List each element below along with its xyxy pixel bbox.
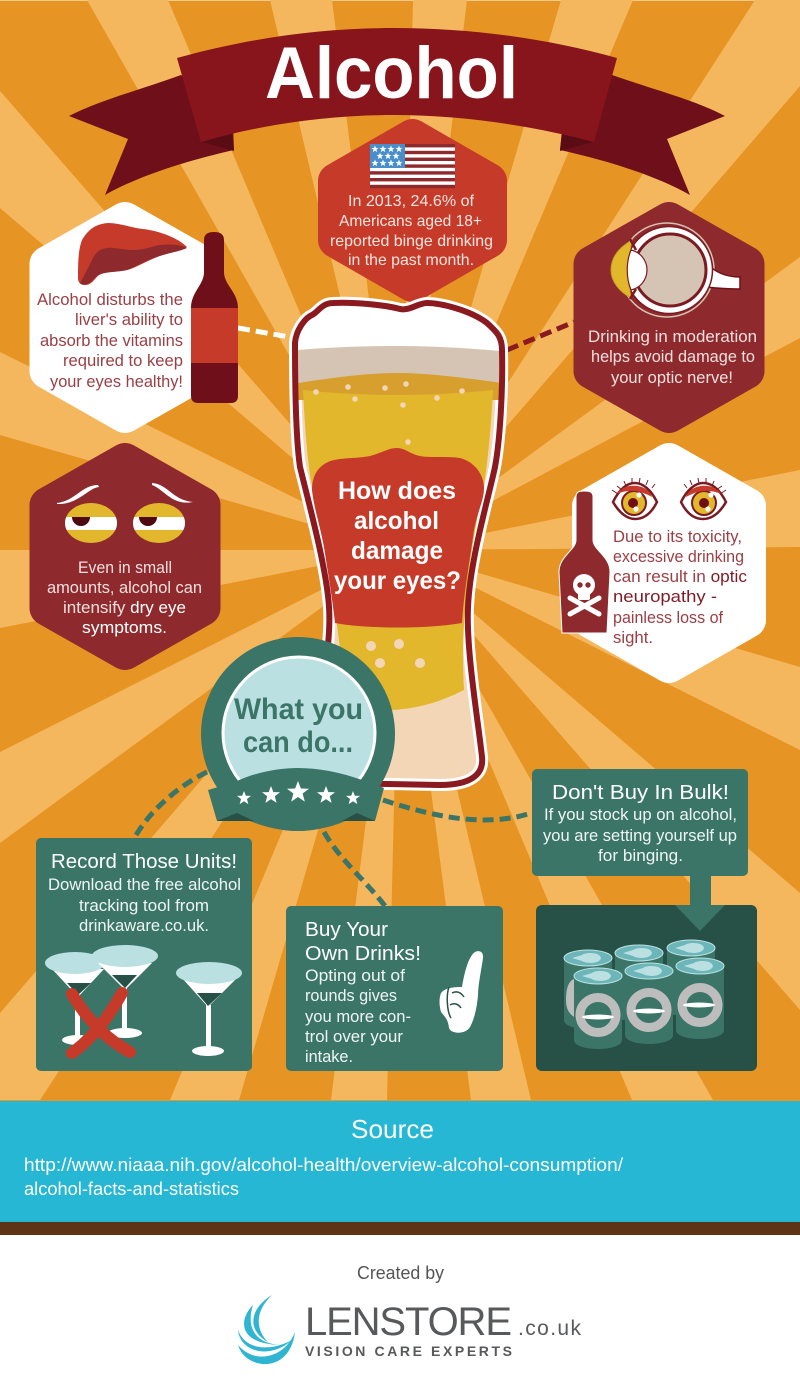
statistic text: In 2013, 24.6% of	[348, 193, 475, 210]
beer glass	[285, 295, 515, 785]
question text	[334, 477, 461, 595]
hexagon background	[592, 220, 746, 415]
box text: intake.	[305, 1048, 353, 1066]
ribbon folds	[217, 813, 375, 821]
box	[286, 906, 503, 1071]
optic nerve text	[588, 328, 757, 387]
dry eye text: Even in small	[78, 559, 172, 577]
statistic text: reported binge drinking	[330, 233, 493, 250]
box text: Opting out of	[305, 967, 405, 985]
source background	[0, 1101, 800, 1222]
neuropathy text: painless loss of	[613, 609, 723, 627]
banner main ribbon	[177, 28, 617, 142]
beer layers	[298, 308, 500, 710]
hexagon background	[336, 137, 489, 284]
neuropathy text	[613, 528, 747, 647]
brown strip	[0, 1222, 800, 1235]
box text: rounds gives	[305, 987, 397, 1005]
banner left fold	[202, 133, 234, 151]
badge: what you can do	[201, 637, 395, 831]
icon: wine bottle	[191, 232, 238, 403]
title banner	[69, 28, 725, 195]
badge text	[234, 693, 363, 759]
icon: sleepy eyes	[57, 483, 193, 543]
source heading: Source	[351, 1114, 434, 1144]
statistic text	[330, 193, 493, 269]
source band	[0, 1101, 800, 1235]
statistic text: in the past month.	[348, 252, 474, 269]
box heading: Own Drinks!	[305, 942, 421, 965]
box	[36, 838, 252, 1071]
optic nerve text: helps avoid damage to	[591, 348, 755, 366]
question label	[312, 448, 484, 628]
hexagon background	[48, 220, 202, 415]
box heading: Buy Your	[305, 918, 388, 941]
banner right fold	[560, 133, 593, 151]
badge inner	[223, 657, 375, 809]
question text: damage	[351, 537, 443, 565]
liver text: liver's ability to	[75, 311, 183, 329]
box heading: Don't Buy In Bulk!	[552, 781, 729, 804]
created by: Created by	[357, 1263, 444, 1283]
panel: optic neuropathy	[559, 461, 748, 665]
box text: tracking tool from	[79, 897, 209, 915]
hexagon background	[48, 461, 202, 652]
label blob	[312, 448, 484, 628]
logo mark	[238, 1295, 295, 1364]
arrow to cans	[675, 870, 725, 931]
panel: record those units	[36, 838, 252, 1071]
connector: badge to record units	[135, 772, 207, 837]
icon: thumb up	[440, 951, 483, 1033]
neuropathy text: can result in optic	[613, 568, 747, 586]
box text: trol over your	[305, 1028, 404, 1046]
logo domain: .co.uk	[518, 1317, 582, 1340]
box text: Download the free alcohol	[48, 876, 241, 894]
dry eye text: amounts, alcohol can	[47, 579, 202, 597]
icon: cans	[564, 940, 724, 1049]
box text: you more con-	[305, 1008, 411, 1026]
box	[532, 769, 748, 876]
panel: buy your own drinks	[286, 906, 503, 1071]
box text: you are setting yourself up	[543, 827, 737, 845]
hexagon background	[590, 461, 748, 665]
icon: bloodshot eyes	[612, 478, 726, 519]
neuropathy text: sight.	[613, 629, 653, 647]
panel: optic nerve	[588, 220, 757, 415]
statistic text: Americans aged 18+	[339, 213, 482, 230]
dry eye text: symptoms.	[82, 619, 167, 637]
box text: drinkaware.co.uk.	[79, 917, 209, 935]
icon: US flag	[370, 144, 455, 188]
liver text: your eyes healthy!	[50, 373, 183, 391]
connector: bottle to glass	[238, 328, 295, 338]
glass white outline	[295, 303, 502, 785]
connector: badge to bulk	[383, 800, 531, 820]
logo wordmark: LENSTORE	[305, 1300, 512, 1344]
liver text: required to keep	[63, 352, 183, 370]
panel: US statistic	[330, 137, 493, 284]
panel: liver	[37, 220, 238, 415]
box text: for binging.	[598, 847, 683, 865]
source link text: alcohol-facts-and-statistics	[24, 1179, 239, 1199]
logo tagline: VISION CARE EXPERTS	[305, 1343, 512, 1359]
question text: alcohol	[354, 507, 439, 535]
icon: martini glasses	[45, 945, 242, 1056]
skull and crossbones	[570, 574, 599, 614]
title text: Alcohol	[265, 33, 518, 114]
icon: liver	[78, 223, 187, 285]
box heading: Record Those Units!	[51, 850, 237, 873]
box text	[543, 806, 737, 865]
neuropathy text: neuropathy -	[613, 588, 717, 606]
box text	[48, 876, 241, 935]
connector: badge to own drinks	[324, 832, 385, 906]
box text	[305, 967, 411, 1066]
icon: poison bottle	[559, 491, 610, 633]
source link text	[24, 1155, 623, 1199]
source link text: http://www.niaaa.nih.gov/alcohol-health/overview-alcohol-consumption/	[24, 1155, 623, 1175]
dry eye text	[47, 559, 202, 637]
liver text: absorb the vitamins	[40, 332, 183, 350]
glass rim	[295, 303, 502, 785]
panel: don't buy in bulk	[532, 769, 748, 931]
dry eye text: intensify dry eye	[63, 599, 186, 617]
icon: red cross	[72, 993, 130, 1053]
neuropathy text: excessive drinking	[613, 548, 744, 566]
optic nerve text: Drinking in moderation	[588, 328, 757, 346]
badge text: can do...	[243, 726, 353, 759]
panel: dry eye	[47, 461, 202, 652]
question text: your eyes?	[334, 567, 461, 595]
ribbon	[208, 768, 384, 831]
banner right tail	[560, 75, 725, 195]
box heading	[305, 918, 421, 965]
dark box	[536, 905, 757, 1071]
background: orange sunburst	[0, 0, 800, 1101]
liver text	[37, 291, 183, 391]
liver text: Alcohol disturbs the	[37, 291, 183, 309]
ribbon stars	[237, 781, 360, 804]
badge circle	[201, 637, 395, 831]
panel: cans	[536, 905, 757, 1071]
connector: glass to eye panel	[507, 322, 574, 350]
badge text: What you	[234, 693, 363, 726]
question text: How does	[338, 477, 456, 505]
optic nerve text: your optic nerve!	[611, 369, 733, 387]
banner left tail	[69, 75, 234, 195]
neuropathy text: Due to its toxicity,	[613, 528, 742, 546]
box text: If you stock up on alcohol,	[544, 806, 737, 824]
footer: credit	[238, 1263, 582, 1364]
icon: eye cross-section	[611, 223, 740, 317]
beer bubbles	[313, 381, 465, 668]
